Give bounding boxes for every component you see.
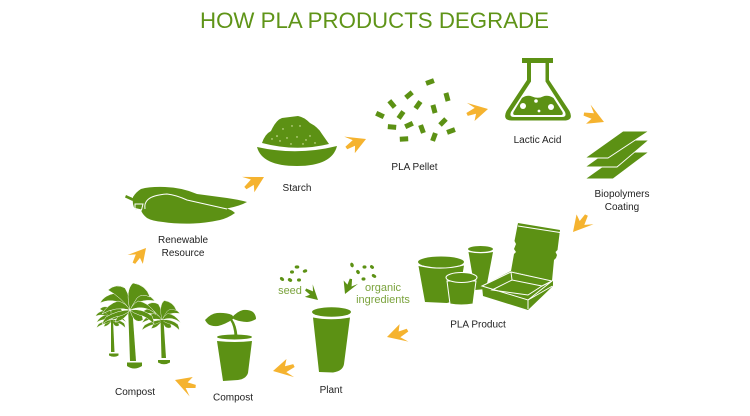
arrow: seed into cup [301, 283, 323, 305]
arrow: ingredients into cup [338, 276, 359, 297]
arrow: seedling to palms [171, 371, 199, 397]
icon: pellets [375, 78, 456, 142]
label: renewable resource: Resource [162, 248, 205, 259]
icon: flask [505, 58, 571, 120]
label: PLA pellet: PLA Pellet [391, 162, 438, 173]
icon: seedling cup [205, 310, 256, 381]
step: renewable resource [125, 187, 247, 259]
arrow: starch to pellet [342, 130, 369, 155]
label: PLA product: PLA Product [450, 320, 506, 330]
label: organic ingredients: ingredients [356, 294, 410, 306]
label: biopolymers coating: Coating [605, 202, 639, 213]
step: lactic acid [505, 58, 571, 146]
icon: stacked layers [585, 131, 649, 179]
step: PLA product [418, 223, 560, 330]
icon: seed dots [279, 265, 308, 283]
arrow: plant to seedling [272, 358, 296, 380]
arrow: lactic acid to coating [580, 104, 608, 131]
title: HOW PLA PRODUCTS DEGRADE [200, 8, 549, 33]
step: PLA pellet [375, 78, 456, 173]
icon: cup with seeds [312, 307, 351, 372]
arrow: compost to renewable resource [126, 242, 152, 268]
label: compost palms: Compost [115, 387, 155, 398]
icon: organic ingredient dots [350, 262, 377, 281]
label: organic ingredients: organic [365, 282, 402, 294]
step: plant [278, 262, 410, 396]
icon: green peppers [125, 187, 247, 224]
label: starch: Starch [283, 183, 311, 194]
icon: large tub [418, 256, 464, 303]
label: plant: Plant [320, 385, 343, 396]
arrow: pellet to lactic acid [465, 100, 489, 122]
icon: open box [482, 223, 560, 310]
arrow: coating to product [566, 209, 595, 238]
cycle arrows [126, 100, 608, 397]
step: compost seedling [205, 310, 256, 404]
label: lactic acid: Lactic Acid [514, 135, 561, 146]
label: compost seedling: Compost [213, 392, 253, 404]
label: renewable resource: Renewable [158, 235, 208, 246]
arrow: resource to starch [240, 169, 268, 195]
icon: starch bowl [257, 116, 337, 166]
icon: small tub [446, 272, 477, 305]
step: compost palms [96, 283, 181, 398]
step: starch [257, 116, 337, 194]
icon: palm trees [96, 283, 181, 368]
arrow: product to plant [385, 323, 410, 346]
step: biopolymers coating [585, 131, 650, 213]
label: seed: seed [278, 285, 302, 297]
label: biopolymers coating: Biopolymers [594, 189, 650, 200]
icon: tall cup [468, 246, 493, 290]
